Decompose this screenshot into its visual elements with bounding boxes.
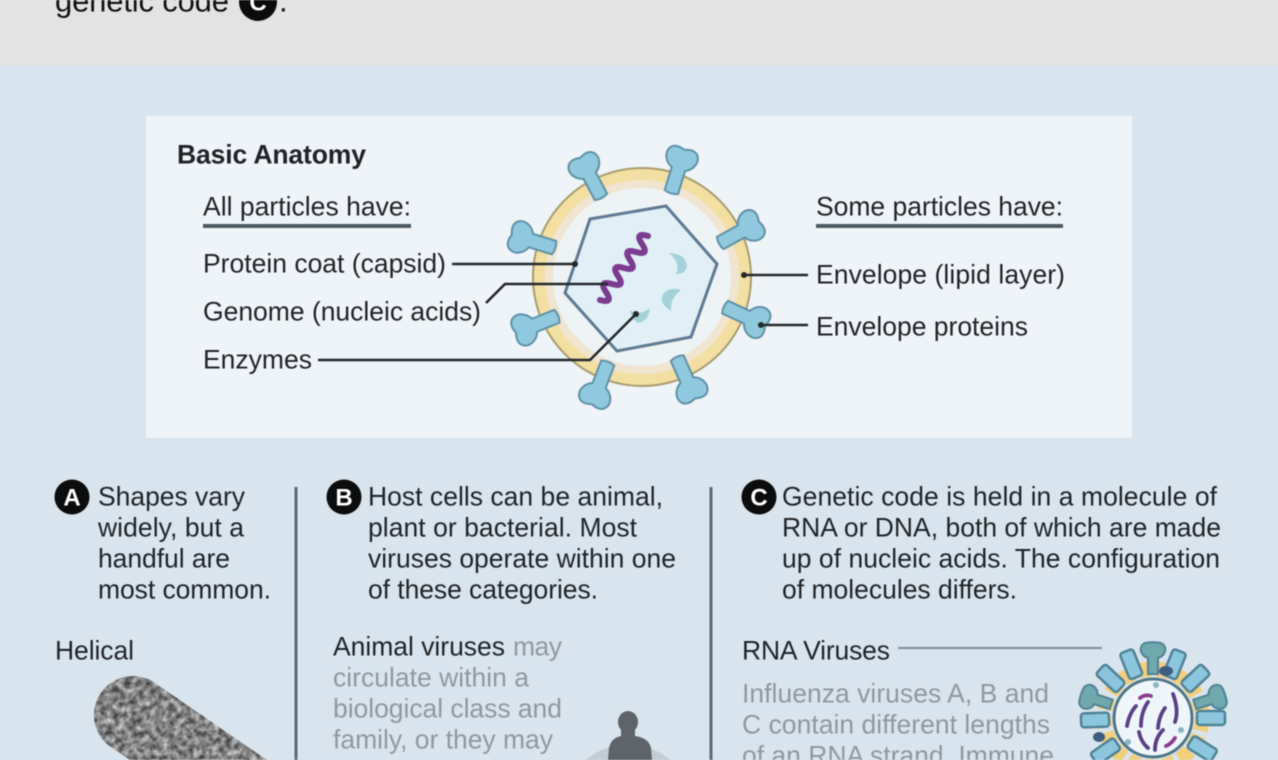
RNA viruses text: C contain different lengths: [742, 710, 1050, 740]
left column: all particles: Genome (nucleic acids): [203, 297, 481, 327]
column A text: [97, 482, 271, 605]
column A text: handful are: [98, 544, 230, 574]
column C text: up of nucleic acids. The configuration: [782, 544, 1220, 574]
column C: [742, 480, 1229, 760]
left column: all particles: Protein coat (capsid): [203, 249, 446, 279]
animal viruses text: family, or they may: [333, 725, 554, 755]
column B: [326, 480, 676, 760]
column B text: of these categories.: [368, 575, 598, 605]
column B text: viruses operate within one: [368, 544, 676, 574]
badge B: [326, 480, 362, 514]
leader lines: [318, 261, 808, 360]
capsid: [565, 206, 717, 351]
left column: all particles: Enzymes: [203, 345, 312, 375]
helical label: Helical: [55, 636, 134, 666]
animal viruses text: may: [513, 632, 563, 662]
animal viruses text: Animal viruses: [333, 632, 505, 662]
column divider: [294, 487, 298, 760]
enzymes: [630, 253, 687, 323]
badge B: B: [335, 485, 353, 512]
animal viruses text: [333, 632, 563, 755]
badge C: C: [750, 485, 768, 512]
surface proteins: [1081, 649, 1225, 760]
column C text: Genetic code is held in a molecule of: [782, 482, 1218, 512]
genome strand: [600, 235, 648, 301]
dark proteins: [1093, 666, 1173, 742]
icon: person: [585, 711, 671, 760]
column B text: plant or bacterial. Most: [368, 513, 638, 543]
RNA segments: [1127, 694, 1177, 750]
envelope protein spikes: [506, 144, 773, 411]
core: [1114, 679, 1192, 757]
right column: some particles: Envelope (lipid layer): [816, 260, 1065, 290]
column B text: Host cells can be animal,: [368, 482, 663, 512]
helical virus: [94, 676, 267, 760]
panel: basic anatomy: [146, 116, 1132, 438]
intro text: [55, 0, 288, 21]
column C text: of molecules differs.: [782, 575, 1017, 605]
badge C: [742, 480, 776, 514]
column divider: [710, 487, 712, 760]
badge A: [54, 480, 90, 514]
yellow envelope: [1104, 669, 1202, 760]
column C text: RNA or DNA, both of which are made: [782, 513, 1221, 543]
column C text: [782, 482, 1221, 605]
teal head proteins: [1077, 642, 1229, 716]
left column: all particles: [203, 192, 481, 375]
right column: some particles: Envelope proteins: [816, 312, 1028, 342]
RNA viruses heading: RNA Viruses: [742, 636, 890, 666]
RNA viruses text: Influenza viruses A, B and: [742, 679, 1049, 709]
enzyme dots: [1125, 682, 1184, 745]
column A text: widely, but a: [97, 513, 244, 543]
lipid envelope: [533, 168, 751, 386]
column A text: most common.: [98, 575, 271, 605]
panel heading: Basic Anatomy: [177, 140, 366, 170]
badge A: A: [63, 485, 81, 512]
column A: [54, 480, 271, 760]
column B text: [368, 482, 676, 605]
virus particle diagram: [506, 144, 773, 411]
right column: some particles: Some particles have:: [816, 192, 1063, 222]
intro band: [0, 0, 1278, 66]
left column: all particles: All particles have:: [203, 192, 411, 222]
animal viruses text: biological class and: [333, 694, 562, 724]
animal viruses text: circulate within a: [333, 663, 529, 693]
column A text: Shapes vary: [98, 482, 246, 512]
icon: RNA virus: [1077, 642, 1229, 760]
RNA viruses text: [742, 679, 1054, 760]
right column: some particles: [816, 192, 1065, 342]
